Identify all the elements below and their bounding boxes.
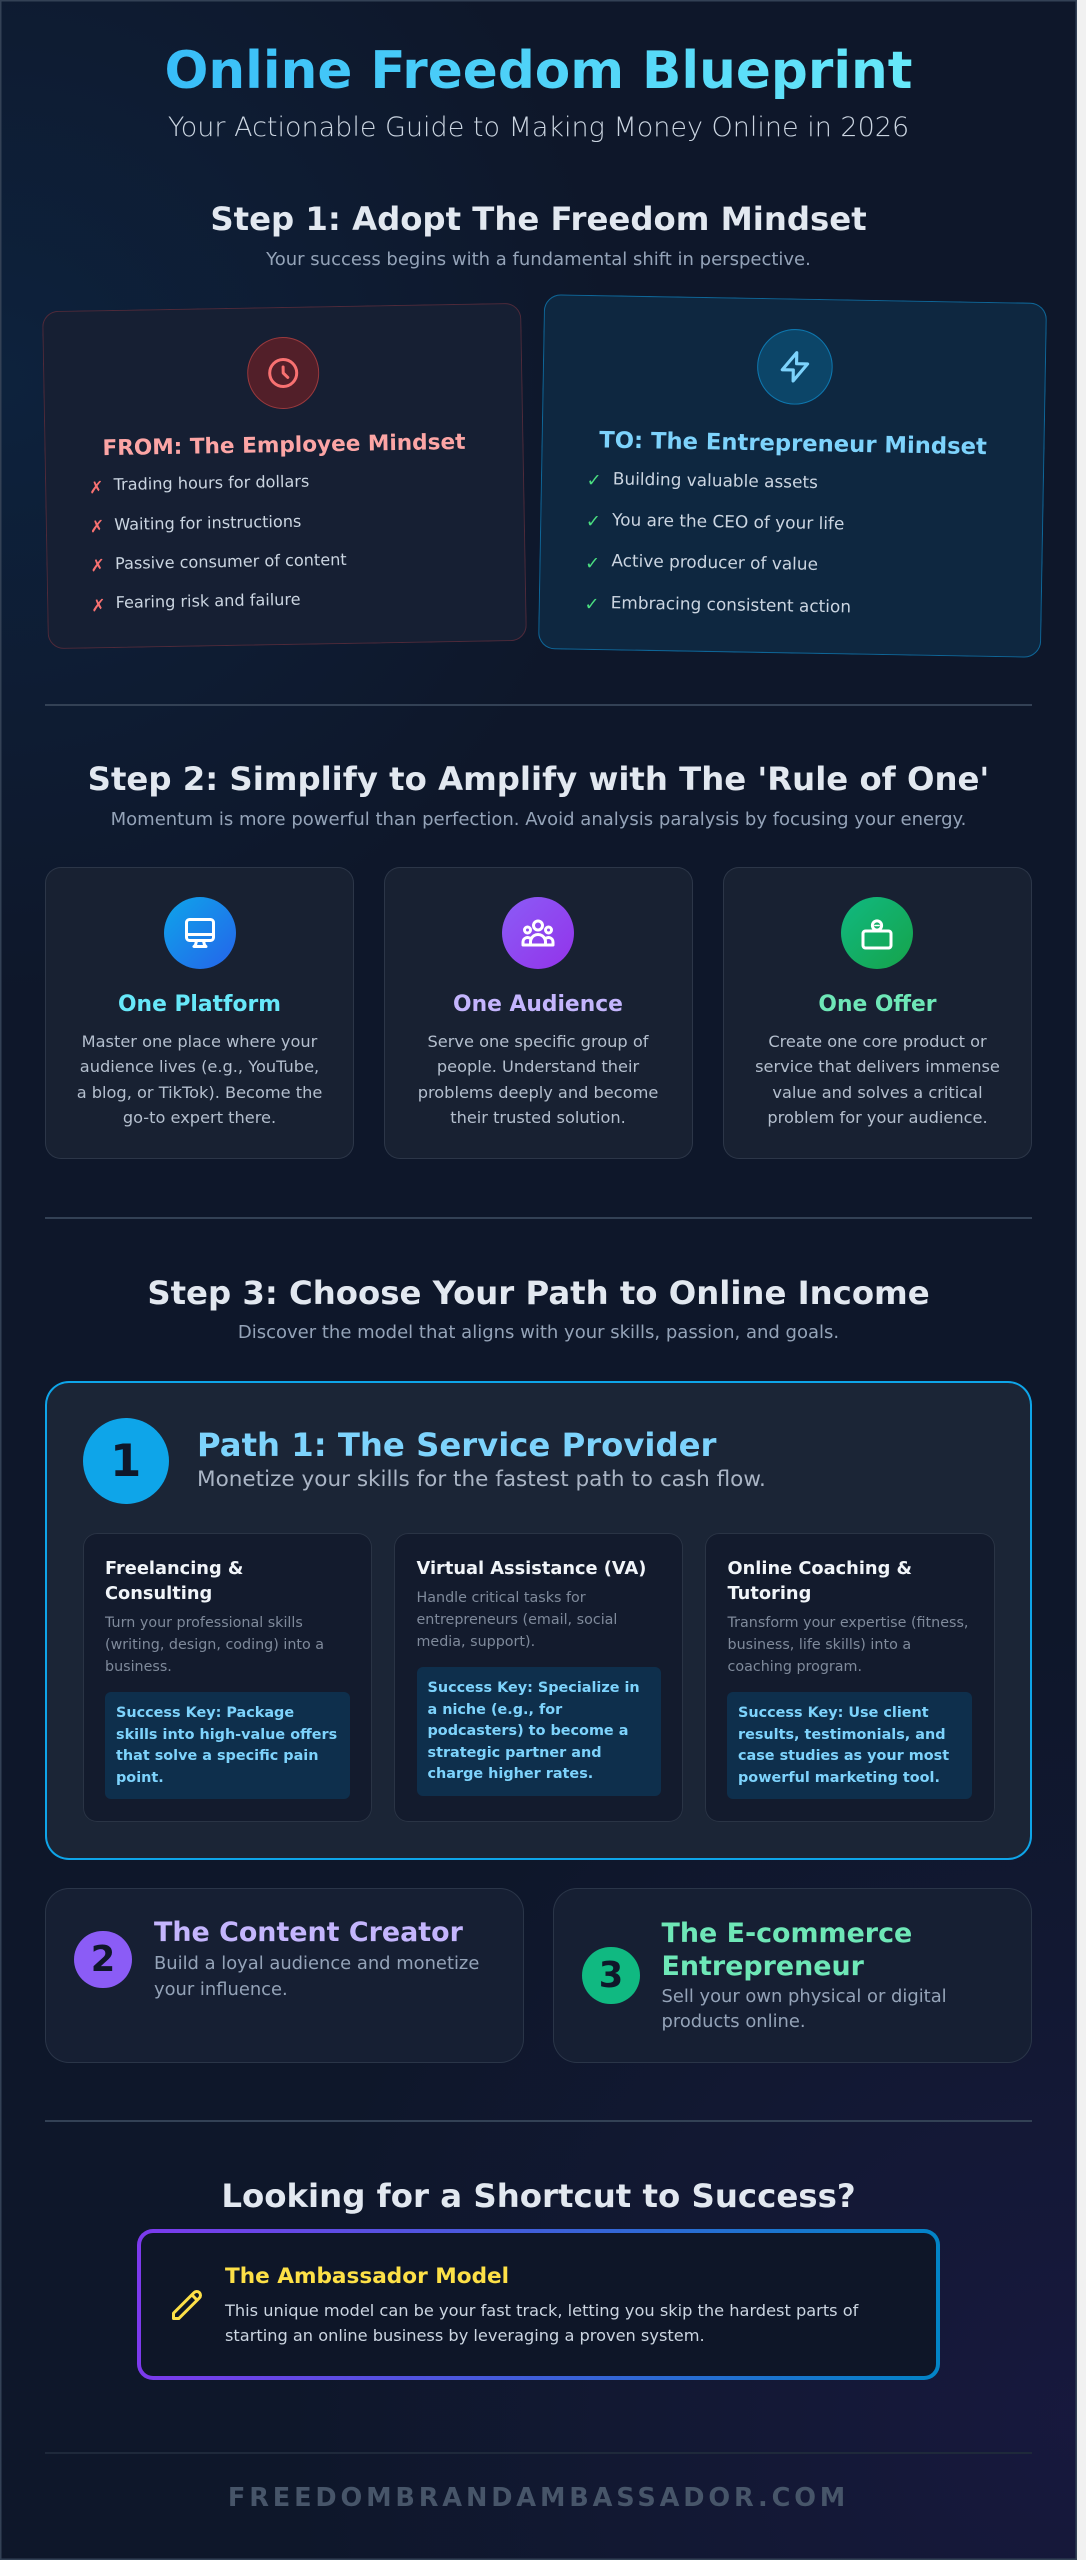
callout: success key bbox=[416, 1667, 661, 1796]
callout: success key: that solve a specific pain bbox=[116, 1748, 318, 1764]
callout: success key bbox=[105, 1692, 350, 1799]
heading: one audience: One Audience bbox=[453, 992, 623, 1017]
list: entrepreneur habits: ✓ bbox=[586, 470, 602, 491]
callout: success key: Success Key: Package bbox=[116, 1705, 294, 1721]
text: one audience: people. Understand their bbox=[437, 1057, 639, 1076]
panel: path 2 content creator bbox=[45, 1888, 524, 2063]
icon: monitor bbox=[164, 897, 236, 969]
badge: number 2 bbox=[74, 1930, 132, 1988]
callout: success key: point. bbox=[116, 1770, 164, 1786]
heading: freelancing bbox=[105, 1558, 243, 1604]
list: entrepreneur habits: Embracing consistent action bbox=[611, 592, 851, 616]
heading: step 3: Step 3: Choose Your Path to Online Income bbox=[147, 1274, 930, 1312]
callout: success key: podcasters) to become a bbox=[428, 1723, 628, 1739]
title: Online Freedom Blueprint bbox=[164, 41, 912, 101]
text: freelancing bbox=[104, 1615, 324, 1675]
callout: success key: charge higher rates. bbox=[428, 1766, 593, 1782]
text: step 3 intro: Discover the model that aligns with your skills, passion, and goals. bbox=[238, 1322, 839, 1343]
list: employee habits: Waiting for instructions bbox=[114, 511, 301, 534]
text: e-commerce entrepreneur: products online. bbox=[662, 2011, 806, 2032]
text: one audience bbox=[418, 1032, 658, 1127]
text: ambassador model bbox=[224, 2301, 859, 2345]
list: entrepreneur habits: Active producer of value bbox=[611, 551, 818, 574]
panel: path 1 service provider bbox=[45, 1380, 1032, 1860]
list: employee habits: ✗ bbox=[91, 596, 106, 616]
panel: one offer bbox=[723, 867, 1032, 1159]
heading: to: TO: The Entrepreneur Mindset bbox=[599, 427, 987, 460]
text: one offer: problem for your audience. bbox=[767, 1108, 988, 1127]
text: ambassador model: This unique model can be your fast track, letting you skip the hardest parts of bbox=[225, 2301, 858, 2320]
text: online coaching bbox=[727, 1615, 968, 1675]
heading: freelancing: Freelancing & bbox=[105, 1558, 243, 1579]
icon: offer box bbox=[841, 897, 913, 969]
list: employee habits: ✗ bbox=[90, 517, 104, 537]
icon: pencil bbox=[172, 2290, 202, 2320]
heading: virtual assistance: Virtual Assistance (VA) bbox=[416, 1558, 646, 1579]
panel: ambassador model bbox=[137, 2229, 940, 2380]
text: one audience: Serve one specific group of bbox=[428, 1032, 648, 1051]
text: one offer: Create one core product or bbox=[768, 1032, 987, 1051]
callout: success key: results, testimonials, and bbox=[738, 1727, 946, 1743]
panel: one audience bbox=[384, 867, 692, 1159]
list: entrepreneur habits: ✓ bbox=[586, 511, 601, 533]
heading: online coaching: Online Coaching & bbox=[728, 1558, 912, 1579]
text: online coaching: coaching program. bbox=[728, 1659, 862, 1675]
text: one platform: audience lives (e.g., YouTube, bbox=[80, 1057, 319, 1076]
text: content creator: Build a loyal audience and monetize bbox=[154, 1953, 479, 1974]
heading: e-commerce entrepreneur bbox=[662, 1918, 912, 1982]
heading: one platform: One Platform bbox=[118, 992, 281, 1017]
callout: success key: skills into high-value offers bbox=[116, 1727, 337, 1743]
heading: content creator: The Content Creator bbox=[154, 1917, 463, 1948]
heading: one offer: One Offer bbox=[818, 992, 937, 1017]
text: step 2 intro: Momentum is more powerful than perfection. Avoid analysis paralysis by focusing your energy. bbox=[111, 809, 966, 830]
list: employee habits: Fearing risk and failure bbox=[116, 590, 301, 612]
heading: ambassador model: The Ambassador Model bbox=[225, 2264, 509, 2289]
list: entrepreneur habits: Building valuable assets bbox=[613, 468, 818, 492]
panel: path 3 e-commerce entrepreneur bbox=[553, 1888, 1032, 2063]
text: one platform: Master one place where your bbox=[82, 1032, 317, 1051]
callout: success key: a niche (e.g., for bbox=[428, 1702, 562, 1718]
text: one platform bbox=[77, 1032, 322, 1127]
text: one offer bbox=[755, 1032, 1000, 1127]
text: freelancing: Turn your professional skills bbox=[105, 1615, 303, 1631]
text: virtual assistance: entrepreneurs (email, social bbox=[416, 1612, 617, 1628]
icon: people bbox=[502, 897, 574, 969]
heading: online coaching bbox=[728, 1558, 912, 1604]
callout: success key: powerful marketing tool. bbox=[738, 1770, 940, 1786]
text: e-commerce entrepreneur bbox=[662, 1986, 947, 2032]
list: entrepreneur habits: ✓ bbox=[585, 553, 600, 574]
list: employee habits: Trading hours for dollars bbox=[113, 472, 309, 494]
panel: to entrepreneur mindset bbox=[538, 294, 1047, 658]
text: one audience: problems deeply and become bbox=[418, 1083, 658, 1102]
callout: success key: Success Key: Use client bbox=[738, 1705, 929, 1721]
heading: freelancing: Consulting bbox=[105, 1583, 212, 1604]
card: online coaching and tutoring bbox=[705, 1533, 994, 1822]
list: employee habits bbox=[89, 472, 347, 616]
card: virtual assistance bbox=[394, 1533, 683, 1822]
heading: shortcut: Looking for a Shortcut to Success? bbox=[221, 2177, 856, 2215]
text: e-commerce entrepreneur: Sell your own physical or digital bbox=[662, 1986, 947, 2006]
panel: from employee mindset bbox=[42, 303, 527, 649]
text: online coaching: business, life skills) into a bbox=[728, 1637, 911, 1653]
card: freelancing and consulting bbox=[83, 1533, 372, 1822]
callout: success key bbox=[727, 1692, 972, 1799]
text: virtual assistance: media, support). bbox=[416, 1634, 535, 1650]
badge: number 1: 1 bbox=[110, 1434, 141, 1487]
text: content creator bbox=[154, 1953, 479, 2000]
heading: online coaching: Tutoring bbox=[728, 1583, 811, 1604]
list: employee habits: ✗ bbox=[89, 478, 104, 498]
footer url: FREEDOMBRANDAMBASSADOR.COM bbox=[228, 2483, 849, 2513]
callout: success key: strategic partner and bbox=[428, 1745, 602, 1761]
list: entrepreneur habits: ✓ bbox=[584, 594, 600, 615]
text: virtual assistance: Handle critical tasks for bbox=[416, 1590, 586, 1606]
list: employee habits: ✗ bbox=[90, 556, 105, 577]
text: online coaching: Transform your expertise (fitness, bbox=[728, 1615, 968, 1631]
heading: e-commerce entrepreneur: Entrepreneur bbox=[662, 1951, 864, 1982]
text: one audience: their trusted solution. bbox=[450, 1108, 626, 1127]
text: one platform: a blog, or TikTok). Become the bbox=[77, 1083, 322, 1102]
panel: one platform bbox=[45, 867, 354, 1159]
badge: number 3 bbox=[582, 1947, 640, 2004]
text: step 1 intro: Your success begins with a fundamental shift in perspective. bbox=[266, 249, 811, 270]
callout: success key: Success Key: Specialize in bbox=[428, 1680, 640, 1696]
text: content creator: your influence. bbox=[154, 1978, 288, 2000]
heading: e-commerce entrepreneur: The E-commerce bbox=[662, 1918, 912, 1949]
text: one offer: service that delivers immense bbox=[755, 1057, 1000, 1076]
text: one platform: go-to expert there. bbox=[123, 1108, 276, 1127]
heading: path 1: Path 1: The Service Provider bbox=[197, 1426, 716, 1464]
list: entrepreneur habits: You are the CEO of your life bbox=[612, 510, 845, 534]
heading: step 1: Step 1: Adopt The Freedom Mindset bbox=[210, 200, 867, 238]
text: path 1 intro: Monetize your skills for the fastest path to cash flow. bbox=[197, 1467, 766, 1492]
heading: from: FROM: The Employee Mindset bbox=[102, 429, 466, 461]
text: one offer: value and solves a critical bbox=[772, 1083, 983, 1102]
badge: number 3: 3 bbox=[599, 1955, 623, 1996]
icon: bolt bbox=[756, 328, 833, 405]
subtitle: Your Actionable Guide to Making Money Online in 2026 bbox=[168, 112, 909, 143]
badge: number 1 bbox=[83, 1418, 169, 1504]
heading: step 2: Step 2: Simplify to Amplify with The 'Rule of One' bbox=[88, 760, 989, 798]
icon: clock bbox=[246, 336, 319, 409]
list: employee habits: Passive consumer of content bbox=[115, 550, 347, 573]
text: freelancing: business. bbox=[105, 1659, 172, 1675]
badge: number 2: 2 bbox=[91, 1938, 115, 1980]
text: freelancing: (writing, design, coding) into a bbox=[105, 1637, 324, 1653]
list: entrepreneur habits bbox=[584, 468, 851, 616]
callout: success key: case studies as your most bbox=[738, 1748, 949, 1764]
text: virtual assistance bbox=[416, 1590, 617, 1650]
text: ambassador model: starting an online business by leveraging a proven system. bbox=[225, 2326, 705, 2345]
title bbox=[0, 41, 1077, 103]
